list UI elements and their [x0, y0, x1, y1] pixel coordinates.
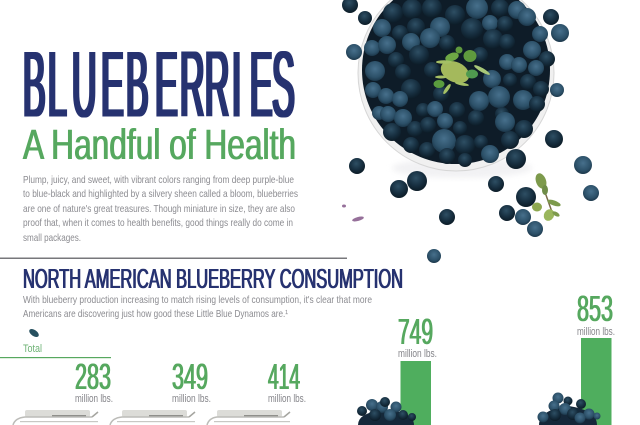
section description: Americans are discovering just how good these Little Blue Dynamos are.¹ [23, 308, 288, 320]
intro paragraph: are one of nature's great treasures. Though miniature in size, they are also [23, 203, 295, 215]
purple crumbs [342, 204, 364, 222]
intro paragraph: small packages. [23, 232, 81, 244]
section description [23, 294, 372, 320]
legend: total [0, 343, 111, 358]
jar: first [13, 410, 98, 425]
intro paragraph [23, 174, 298, 244]
bowl rim [358, 0, 554, 171]
value: 349 [172, 356, 211, 405]
jar: second [110, 410, 195, 425]
bowl interior [362, 0, 550, 164]
scattered berries [342, 0, 599, 263]
cup of berries: left [357, 397, 416, 425]
bar: 749 [398, 311, 437, 425]
value: 349: million lbs. [172, 393, 211, 405]
subtitle: A Handful of Health [23, 121, 296, 169]
berries in bowl [364, 0, 555, 167]
icon: small berry sprig [28, 327, 40, 339]
section divider line [0, 258, 347, 259]
bar: 853 [577, 288, 615, 425]
bar: 749: million lbs. [398, 348, 437, 360]
section description: With blueberry production increasing to match rising levels of consumption, it's clear that more [23, 294, 372, 306]
photo: bowl of blueberries [342, 0, 599, 263]
value: 283 [75, 356, 113, 405]
title: BLUEBERRIES [23, 31, 295, 136]
bar: 853: million lbs. [577, 326, 615, 338]
value: 414: million lbs. [268, 393, 306, 405]
value: 349: 349 [172, 356, 208, 397]
value: 414: 414 [268, 356, 300, 397]
cup of berries: right [538, 392, 600, 425]
jar: third [207, 410, 290, 425]
value: 283: million lbs. [75, 393, 113, 405]
intro paragraph: Plump, juicy, and sweet, with vibrant colors ranging from deep purple-blue [23, 174, 294, 186]
bar: 853: 853 [577, 288, 613, 329]
value: 414 [268, 356, 306, 405]
intro paragraph: proof that, when it comes to health benefits, good things really do come in [23, 217, 293, 229]
intro paragraph: to blue-black and highlighted by a silvery sheen called a bloom, blueberries [23, 188, 298, 200]
legend: total: Total [23, 343, 42, 355]
loose mint sprig [532, 172, 561, 223]
value: 283: 283 [75, 356, 111, 397]
bar: 749: 749 [398, 311, 433, 352]
mint leaves on bowl [434, 46, 491, 95]
